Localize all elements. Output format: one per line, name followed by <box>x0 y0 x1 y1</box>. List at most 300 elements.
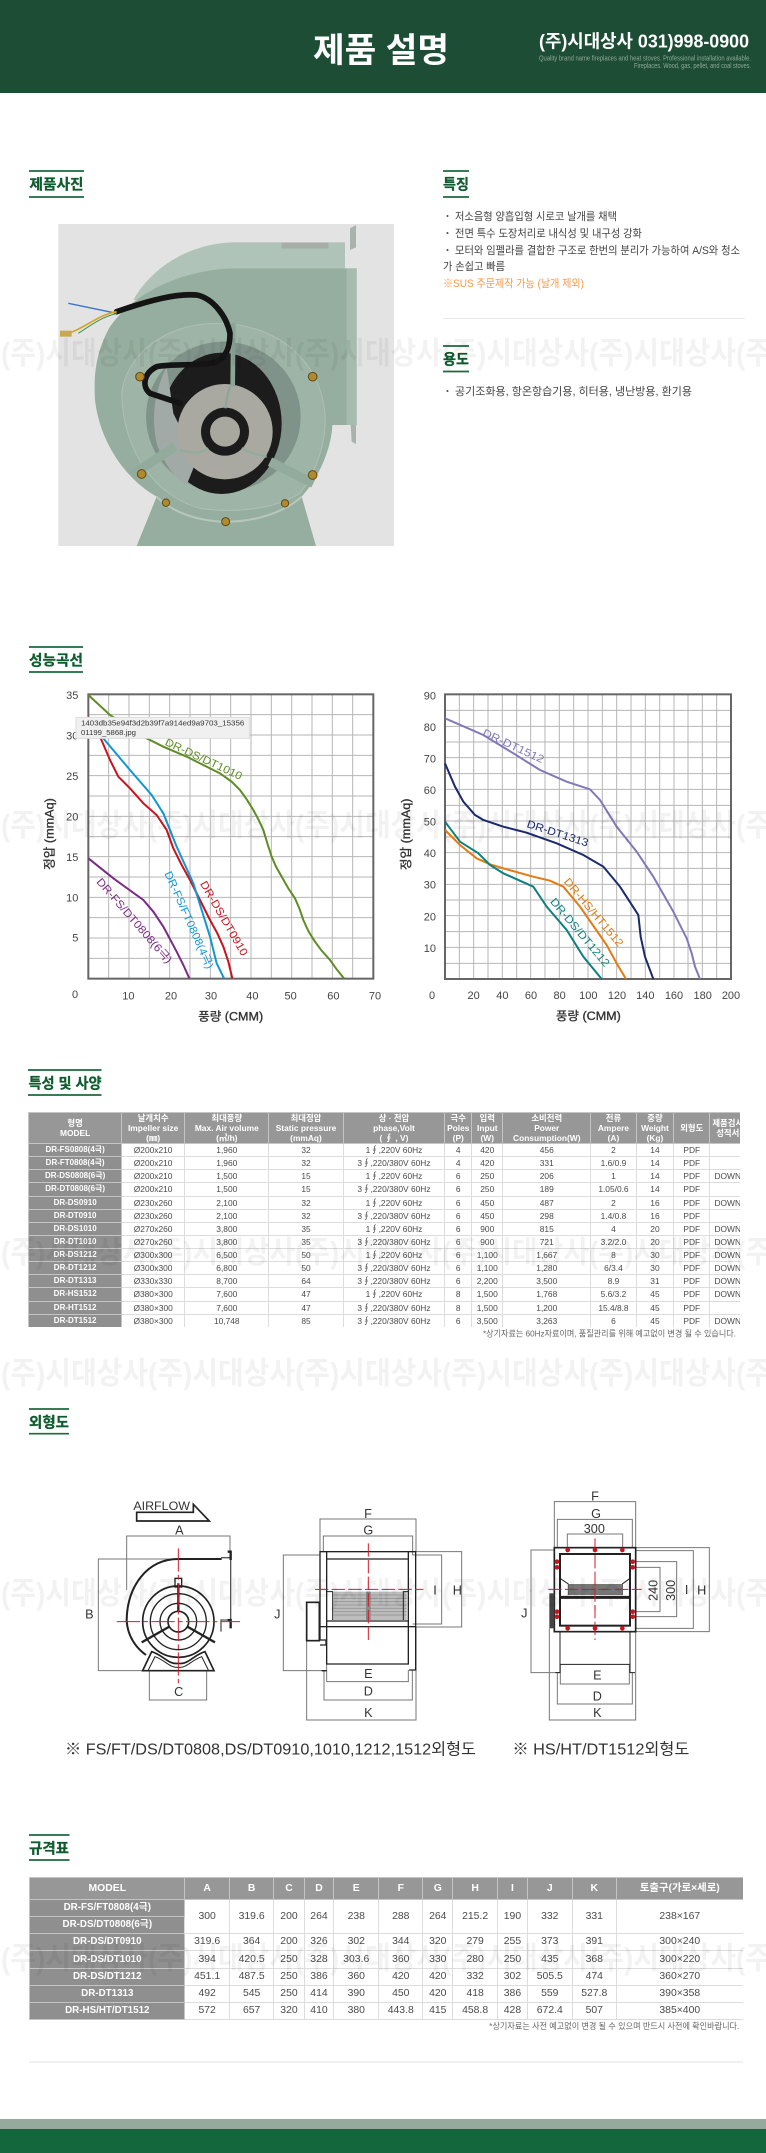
dimensions table: 300 <box>198 1911 216 1922</box>
spec table: 3,500 <box>536 1276 557 1286</box>
spec table: 14 <box>650 1145 660 1155</box>
spec table: Static pressure <box>276 1123 336 1133</box>
chart: performance curves large models: 10 <box>424 943 436 955</box>
spec table: 15 <box>301 1184 311 1194</box>
spec table: 6 <box>456 1316 461 1326</box>
spec table: 20 <box>650 1224 660 1234</box>
spec table: DR-DT1512 <box>54 1316 96 1325</box>
motor <box>549 1593 554 1628</box>
drawing: front and side views: J <box>274 1608 280 1622</box>
chart: performance curves large models: 120 <box>608 990 626 1002</box>
dimensions table: 492 <box>198 1988 216 1999</box>
spec table: DR-DS0910 <box>54 1198 97 1207</box>
dimension letters: D <box>593 1689 602 1703</box>
spec table: 극수 <box>451 1113 466 1123</box>
drawing: front and side views: I <box>433 1584 437 1598</box>
spec table: 32 <box>301 1158 311 1168</box>
spec table: (Kg) <box>647 1133 663 1143</box>
spec table: 3∮,220/380V 60Hz <box>357 1184 431 1194</box>
dimensions table: 420.5 <box>239 1954 265 1965</box>
chart: performance curves small models: 15 <box>66 852 78 864</box>
spec table: 31 <box>650 1276 660 1286</box>
spec table: 6 <box>456 1198 461 1208</box>
dimensions table: 300×220 <box>659 1954 700 1965</box>
spec table: DR-DT1010 <box>54 1237 96 1246</box>
chart: performance curves large models: 20 <box>468 990 480 1002</box>
spec table: 16 <box>650 1198 660 1208</box>
spec table: MODEL <box>60 1128 90 1138</box>
dimensions table: 264 <box>429 1911 446 1922</box>
dimensions table: 474 <box>586 1971 603 1982</box>
spec table: 3∮,220/380V 60Hz <box>357 1237 431 1247</box>
spec table: 1 <box>611 1171 616 1181</box>
spec table: 8 <box>456 1303 461 1313</box>
dimensions table: 288 <box>392 1911 409 1922</box>
spec table: 1.05/0.6 <box>598 1184 629 1194</box>
spec table: PDF <box>683 1316 700 1326</box>
curve label orange: DR-HS/HT1512 <box>561 876 625 949</box>
chart: performance curves large models: 90 <box>424 690 436 702</box>
spec table: 1,280 <box>536 1263 557 1273</box>
spec table: 4 <box>611 1224 616 1234</box>
dimension letters: J <box>521 1606 527 1620</box>
spec table: Power <box>534 1123 559 1133</box>
dimensions table: 332 <box>541 1911 558 1922</box>
dimensions table: 250 <box>504 1954 521 1965</box>
curve label purple: DR-DT1512 <box>480 727 546 766</box>
spec table: 15 <box>301 1171 311 1181</box>
spec table: (㎥/h) <box>216 1133 237 1143</box>
spec table: 1,500 <box>216 1184 237 1194</box>
drawing: front and side views: C <box>174 1685 183 1699</box>
spec table: Ø230x260 <box>134 1198 172 1208</box>
chart: performance curves small models: 35 <box>66 690 78 702</box>
dimensions table <box>29 1877 743 2020</box>
spec table: PDF <box>683 1158 700 1168</box>
heading: characteristics and specifications: 특성 및 사양 <box>28 1076 102 1092</box>
dimensions table: 360 <box>392 1954 409 1965</box>
heading: outline drawing <box>29 1409 69 1434</box>
dimensions table: DR-DS/DT1010 <box>73 1954 142 1965</box>
curve label navy: DR-DT1313 <box>525 818 590 850</box>
dimensions table: 250 <box>280 1954 298 1965</box>
spec table: 1∮,220V 60Hz <box>366 1289 422 1299</box>
spec table: 1,768 <box>536 1289 557 1299</box>
chart: performance curves small models: 25 <box>66 771 78 783</box>
spec table: 1∮,220V 60Hz <box>366 1250 422 1260</box>
spec table: 중량 <box>647 1113 663 1123</box>
dimensions table: 280 <box>466 1954 484 1965</box>
spec table: PDF <box>683 1145 700 1155</box>
spec table: 6 <box>456 1224 461 1234</box>
spec table: 20 <box>650 1237 660 1247</box>
dimensions table: K <box>591 1883 598 1894</box>
dimensions table: 390 <box>348 1988 365 1999</box>
dimensions table: 545 <box>243 1988 260 1999</box>
dimensions table: B <box>248 1883 255 1894</box>
spec table: 6 <box>456 1211 461 1221</box>
front view center lines <box>117 1548 240 1683</box>
caption right: ※ HS/HT/DT1512외형도 <box>512 1740 689 1758</box>
dimensions table: MODEL <box>89 1883 126 1894</box>
spec table: 6 <box>456 1250 461 1260</box>
spec table: Ø200x210 <box>134 1158 172 1168</box>
dimensions table: 420 <box>429 1988 446 1999</box>
spec table: 456 <box>540 1145 554 1155</box>
spec table: 날개치수 <box>138 1113 169 1123</box>
dimensions table: 303.6 <box>343 1954 369 1965</box>
spec table: PDF <box>683 1184 700 1194</box>
spec table: 8,700 <box>216 1276 237 1286</box>
chart: performance curves large models: 40 <box>496 990 508 1002</box>
spec table: 1,500 <box>477 1289 498 1299</box>
dimension letters <box>521 1489 706 1720</box>
spec table <box>28 1112 740 1327</box>
spec table: 1,960 <box>216 1145 237 1155</box>
heading: dimensions table <box>29 1835 70 1860</box>
curve: DR-DT1313 <box>445 763 653 979</box>
chart: performance curves large models: 60 <box>424 785 436 797</box>
spec table: Consumption(W) <box>513 1133 580 1143</box>
spec table: (A) <box>608 1133 619 1143</box>
dimensions table: 320 <box>280 2005 298 2016</box>
filename tooltip: 1403db35e94f3d2b39f7a914ed9a9703_15356 <box>81 720 244 727</box>
dimensions table: 331 <box>586 1911 603 1922</box>
dimensions table: 328 <box>310 1954 328 1965</box>
spec table: Ø270x260 <box>134 1237 172 1247</box>
heading: product photo <box>29 171 84 197</box>
spec table: Ø200x210 <box>134 1171 172 1181</box>
curve: DR-DS/DT0910 <box>88 717 232 978</box>
spec table: Ø230x260 <box>134 1211 172 1221</box>
heading: applications: 용도 <box>443 352 469 368</box>
spec table: 1∮,220V 60Hz <box>366 1198 422 1208</box>
spec table: PDF <box>683 1276 700 1286</box>
dimensions table: DR-HS/HT/DT1512 <box>65 2005 149 2016</box>
spec table: 1,100 <box>477 1250 498 1260</box>
drawing: front and side views: A <box>175 1524 184 1538</box>
chart: performance curves large models: 70 <box>424 754 436 766</box>
spec table: 900 <box>480 1237 494 1247</box>
dimensions table: DR-FS/FT0808(4극) <box>64 1902 151 1913</box>
spec table: 2,200 <box>477 1276 498 1286</box>
chart: performance curves large models: 50 <box>424 817 436 829</box>
chart: performance curves small models: 50 <box>285 990 297 1002</box>
dimensions table: 572 <box>198 2005 216 2016</box>
spec table: 6 <box>456 1237 461 1247</box>
chart: performance curves small models: 30 <box>205 990 217 1002</box>
dimensions table: 373 <box>541 1936 558 1947</box>
dimensions table: 386 <box>310 1971 328 1982</box>
dimensions table: 418 <box>466 1988 484 1999</box>
spec table: 6 <box>456 1171 461 1181</box>
spec table: Ø330x330 <box>134 1276 172 1286</box>
applications text: 공기조화용, 항온항습기용, 히터용, 냉난방용, 환기용 <box>455 384 692 398</box>
curve: DR-FS/FT0808 <box>88 720 224 978</box>
spec table: 85 <box>301 1316 311 1326</box>
spec table: 8 <box>456 1289 461 1299</box>
spec table: 3∮,220/380V 60Hz <box>357 1303 431 1313</box>
chart: performance curves small models: 5 <box>72 932 78 944</box>
spec table: 2,100 <box>216 1198 237 1208</box>
chart: performance curves small models: 20 <box>66 812 78 824</box>
chart: performance curves large models: 80 <box>554 990 566 1002</box>
spec table: PDF <box>683 1303 700 1313</box>
dimensions table: C <box>285 1883 293 1894</box>
curve: DR-DT1512 <box>445 718 700 979</box>
spec table: PDF <box>683 1224 700 1234</box>
spec table: 3,800 <box>216 1237 237 1247</box>
drawing: front and side views: B <box>85 1608 94 1622</box>
spec table: 6,800 <box>216 1263 237 1273</box>
dimensions table: 302 <box>504 1971 521 1982</box>
dimensions table: 360 <box>348 1971 365 1982</box>
title: 제품 설명 <box>313 32 449 70</box>
dimensions table: 250 <box>280 1971 298 1982</box>
dimension letters: E <box>593 1669 602 1683</box>
spec table: 331 <box>540 1158 554 1168</box>
spec table: Ø270x260 <box>134 1224 172 1234</box>
chart: performance curves small models: 30 <box>66 731 78 743</box>
spec table: 487 <box>540 1198 554 1208</box>
spec table: (W) <box>481 1133 494 1143</box>
spec table: 2,100 <box>216 1211 237 1221</box>
spec table: 입력 <box>480 1113 495 1123</box>
chart: performance curves large models: 60 <box>525 990 537 1002</box>
spec table: 30 <box>650 1263 660 1273</box>
spec table: Ø200x210 <box>134 1184 172 1194</box>
spec table: 2 <box>611 1198 616 1208</box>
spec table: 1,500 <box>216 1171 237 1181</box>
chart: performance curves large models: 40 <box>424 848 436 860</box>
dimensions table: 330 <box>429 1954 446 1965</box>
heading: features <box>443 171 469 197</box>
features list: 모터와 임펠라를 결합한 구조로 한번의 분리가 가능하여 A/S와 청소 <box>455 243 740 257</box>
chart: performance curves small models: 70 <box>369 990 381 1002</box>
filename tooltip: 01199_5868.jpg <box>81 730 136 737</box>
spec table: 15.4/8.8 <box>598 1303 629 1313</box>
dimensions table: 527.8 <box>581 1988 607 1999</box>
spec table: Poles <box>447 1123 469 1133</box>
dimensions table: G <box>434 1883 442 1894</box>
dimensions table: 380 <box>348 2005 365 2016</box>
spec table: 900 <box>480 1224 494 1234</box>
spec table: 250 <box>480 1184 494 1194</box>
chart: performance curves large models: 140 <box>636 990 654 1002</box>
company name and phone: (주)시대상사 031)998-0900 <box>539 32 749 52</box>
spec table: DR-DT0808(6극) <box>45 1184 105 1193</box>
spec table: PDF <box>683 1171 700 1181</box>
spec table: DR-DT1212 <box>54 1263 96 1272</box>
heading: characteristics and specifications <box>28 1070 102 1095</box>
housing <box>554 1548 636 1673</box>
dimensions table: 410 <box>310 2005 328 2016</box>
dimension letters: K <box>593 1706 602 1720</box>
dimensions table: 451.1 <box>194 1971 220 1982</box>
spec table: 소비전력 <box>531 1113 562 1123</box>
spec table: 45 <box>650 1316 660 1326</box>
dimensions table: 385×400 <box>659 2005 700 2016</box>
dimension lines <box>531 1502 709 1720</box>
dimensions table: H <box>471 1883 479 1894</box>
dimensions table: DR-DS/DT0910 <box>73 1936 142 1947</box>
dimensions table: 319.6 <box>239 1911 265 1922</box>
curve label teal: DR-DS/DT1212 <box>547 896 612 969</box>
spec table: 16 <box>650 1211 660 1221</box>
spec table: 3∮,220/380V 60Hz <box>357 1211 431 1221</box>
heading: applications <box>443 346 469 372</box>
spec table: 4 <box>456 1158 461 1168</box>
dimensions table: 435 <box>541 1954 558 1965</box>
dimension letters: 300 <box>664 1580 678 1601</box>
curve label purple: DR-FS/DT0808(6극) <box>94 876 174 966</box>
spec table: DR-DS0808(6극) <box>45 1171 105 1180</box>
spec table: DR-FS0808(4극) <box>45 1145 105 1154</box>
x axis title: 풍량 (CMM) <box>198 1010 263 1024</box>
heading: product photo: 제품사진 <box>30 176 84 194</box>
spec table: 6 <box>611 1316 616 1326</box>
dimensions table: DR-DS/DT1212 <box>73 1971 142 1982</box>
dimensions table: 364 <box>243 1936 260 1947</box>
dimension letters: G <box>591 1507 601 1521</box>
side view impeller hatch <box>333 1592 407 1620</box>
features list: ※SUS 주문제작 가능 (날개 제외) <box>443 277 584 290</box>
spec table: DR-DT0910 <box>54 1211 96 1220</box>
curve: DR-DS/DT1212 <box>445 822 602 979</box>
spec table: 8.9 <box>608 1276 619 1286</box>
dimensions table: 326 <box>310 1936 328 1947</box>
filename tooltip <box>76 717 249 738</box>
chart: performance curves large models: 200 <box>722 990 740 1002</box>
spec table: 10,748 <box>214 1316 240 1326</box>
dimensions table: E <box>353 1883 360 1894</box>
dimensions table: 672.4 <box>537 2005 563 2016</box>
drawing: front and side views: E <box>364 1667 373 1681</box>
dimensions table: 344 <box>392 1936 409 1947</box>
heading: performance curves <box>29 647 83 672</box>
spec table: 1,667 <box>536 1250 557 1260</box>
spec table: 형명 <box>67 1118 83 1128</box>
spec table: DR-FT0808(4극) <box>46 1158 105 1167</box>
spec table: 3∮,220/380V 60Hz <box>357 1158 431 1168</box>
spec table: 1∮,220V 60Hz <box>366 1145 422 1155</box>
dimensions table: 190 <box>504 1911 521 1922</box>
spec table: (㎜) <box>146 1133 160 1143</box>
impeller <box>568 1584 622 1595</box>
dimension letters: 240 <box>647 1580 661 1601</box>
dimensions table: 420 <box>429 1971 446 1982</box>
spec table: 7,600 <box>216 1289 237 1299</box>
x axis title: 풍량 (CMM) <box>556 1009 621 1023</box>
spec table: DR-DT1313 <box>54 1276 96 1285</box>
spec table: 3∮,220/380V 60Hz <box>357 1276 431 1286</box>
front view dimension lines <box>98 1536 230 1700</box>
dimensions table: 505.5 <box>537 1971 563 1982</box>
spec table: 외형도 <box>680 1123 703 1133</box>
spec table: Ø200x210 <box>134 1145 172 1155</box>
spec table: 5.6/3.2 <box>601 1289 626 1299</box>
heading: outline drawing: 외형도 <box>29 1414 69 1432</box>
front view housing <box>127 1552 231 1671</box>
dimensions table: 386 <box>504 1988 521 1999</box>
side view housing <box>307 1552 416 1671</box>
spec table: 45 <box>650 1289 660 1299</box>
chart: performance curves small models: 40 <box>246 990 258 1002</box>
spec table: 32 <box>301 1145 311 1155</box>
drawing: front and side views: K <box>364 1706 373 1720</box>
spec table: 6/3.4 <box>604 1263 623 1273</box>
spec table: (P) <box>453 1133 464 1143</box>
spec table footnote: *상기자료는 60Hz자료이며, 품질관리를 위해 예고없이 변경 될 수 있습니다. <box>483 1328 736 1338</box>
spec table: 1∮,220V 60Hz <box>366 1171 422 1181</box>
spec table: 1,200 <box>536 1303 557 1313</box>
airflow arrow <box>133 1499 209 1521</box>
spec table: 3,500 <box>477 1316 498 1326</box>
dimensions table: 391 <box>586 1936 603 1947</box>
features list <box>443 209 740 290</box>
spec table: 3.2/2.0 <box>601 1237 626 1247</box>
spec table: 420 <box>480 1145 494 1155</box>
dimensions table: 360×270 <box>659 1971 700 1982</box>
dimensions table: 414 <box>310 1988 328 1999</box>
spec table: 64 <box>301 1276 311 1286</box>
center lines and bolts <box>548 1538 642 1640</box>
dimension letters: H <box>697 1584 706 1598</box>
spec table: Ø300x300 <box>134 1263 172 1273</box>
spec table: 성적서 <box>716 1128 739 1138</box>
dimensions table: 238×167 <box>659 1911 700 1922</box>
drawing: front and side views: H <box>453 1584 462 1598</box>
spec table: 450 <box>480 1198 494 1208</box>
dimensions table: 279 <box>466 1936 484 1947</box>
spec table: PDF <box>683 1211 700 1221</box>
spec table: 6 <box>456 1276 461 1286</box>
dimensions table: 215.2 <box>462 1911 488 1922</box>
dimensions table: 428 <box>504 2005 521 2016</box>
spec table: Ampere <box>598 1123 629 1133</box>
dimensions table: 415 <box>429 2005 446 2016</box>
dimensions table: 443.8 <box>388 2005 414 2016</box>
chart: performance curves large models: 160 <box>665 990 683 1002</box>
dimension letters: F <box>591 1489 599 1503</box>
curve: DR-DS/DT1010 <box>88 695 344 978</box>
page header band <box>0 0 766 93</box>
footer band <box>0 2119 766 2153</box>
drawing: front and side views: F <box>364 1507 372 1521</box>
spec table: phase,Volt <box>373 1123 415 1133</box>
spec table: 3∮,220/380V 60Hz <box>357 1263 431 1273</box>
dimensions table: 507 <box>586 2005 603 2016</box>
spec table: 2 <box>611 1145 616 1155</box>
spec table: 3,800 <box>216 1224 237 1234</box>
spec table: 206 <box>540 1171 554 1181</box>
heading: dimensions table: 규격표 <box>29 1840 69 1858</box>
dimensions table: 657 <box>243 2005 260 2016</box>
caption left: ※ FS/FT/DS/DT0808,DS/DT0910,1010,1212,1512외형도 <box>65 1740 476 1758</box>
spec table: 1,100 <box>477 1263 498 1273</box>
dimensions table: 332 <box>466 1971 484 1982</box>
spec table: 6,500 <box>216 1250 237 1260</box>
drawing: front and side views <box>65 1499 476 1758</box>
spec table: 815 <box>540 1224 554 1234</box>
dimensions table: 302 <box>348 1936 365 1947</box>
spec table: Ø380×300 <box>133 1289 173 1299</box>
y axis title: 정압 (mmAq) <box>42 798 56 870</box>
spec table: 298 <box>540 1211 554 1221</box>
features list: 저소음형 양흡입형 시로코 날개를 채택 <box>455 209 617 223</box>
chart: performance curves large models: 100 <box>579 990 597 1002</box>
airflow arrow: AIRFLOW <box>133 1499 190 1513</box>
